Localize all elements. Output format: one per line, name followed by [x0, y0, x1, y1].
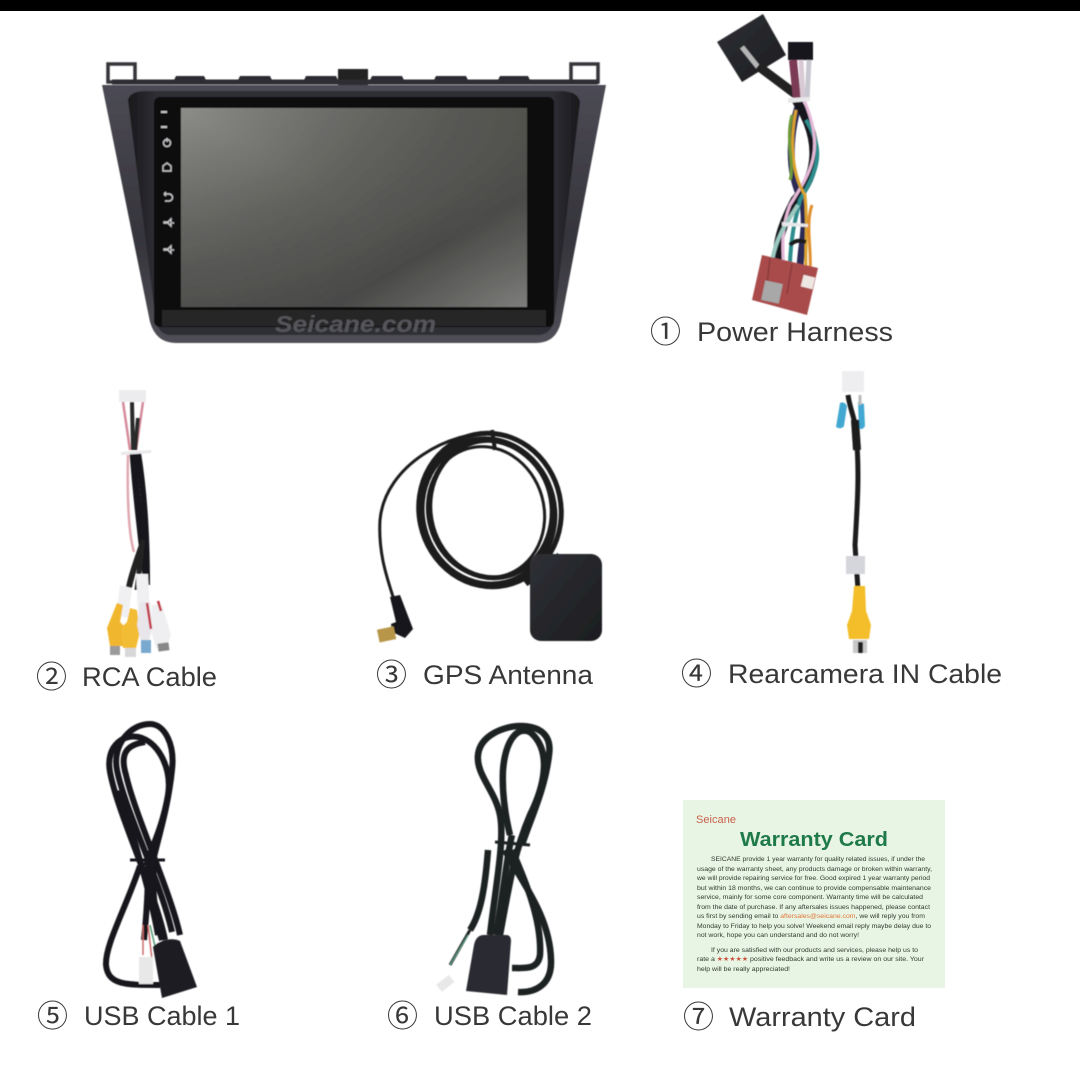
watermark: Seicane.com [275, 311, 436, 337]
warranty card: Seicane [696, 814, 736, 826]
angled connector [390, 595, 413, 638]
head unit radio [102, 64, 606, 343]
warranty text: but within 18 months, we can continue to provide compensable maintenance [697, 885, 931, 892]
USB plug [153, 939, 197, 998]
label: warranty card [683, 992, 916, 1037]
label: USB cable 1: ⑤ [37, 991, 68, 1036]
label: GPS antenna: GPS Antenna [423, 660, 594, 690]
label: USB cable 2 [387, 991, 592, 1036]
label: rear camera cable: Rearcamera IN Cable [728, 659, 1002, 689]
labels on wires [116, 574, 150, 618]
antenna plug [742, 47, 762, 72]
label: rear camera cable [681, 649, 1002, 694]
RCA cable [107, 390, 171, 657]
label: rear camera cable: ④ [681, 649, 712, 694]
black module [717, 14, 786, 82]
warranty text: If you are satisfied with our products and services, please help us to [711, 947, 918, 954]
display panel [154, 97, 554, 327]
cable coil [380, 420, 575, 600]
label: USB cable 2: ⑥ [387, 991, 418, 1036]
outer bezel [102, 85, 606, 343]
thin lead [380, 433, 497, 600]
power harness [717, 14, 818, 315]
red connector [752, 255, 818, 315]
label: RCA cable: ② [36, 652, 67, 697]
side buttons [161, 112, 174, 253]
GPS antenna [377, 420, 602, 643]
warranty text: we will provide repairing service for free. Good expired 1 year warranty period [696, 875, 930, 882]
warranty text: Monday to Friday to help you solve! Weekend email reply maybe delay due to [697, 923, 931, 930]
label: RCA cable: RCA Cable [82, 662, 217, 692]
label: RCA cable [36, 652, 217, 697]
USB cable 2 [436, 726, 551, 995]
label: GPS antenna [376, 650, 594, 695]
label: USB cable 1 [37, 991, 240, 1036]
label: power harness [650, 307, 893, 352]
label: USB cable 1: USB Cable 1 [84, 1001, 240, 1031]
label: GPS antenna: ③ [376, 650, 407, 695]
warranty text: from the date of purchase. If any aftersales issues happened, please contact [697, 904, 930, 911]
rear camera cable [836, 371, 871, 653]
wires [772, 60, 817, 275]
label: warranty card: ⑦ [683, 992, 714, 1037]
warranty text: rate a ★★★★★ positive feedback and write us a review on our site. Your [697, 955, 925, 963]
top black bar [0, 0, 1080, 11]
warranty card: Warranty Card [740, 829, 888, 851]
warranty text [696, 856, 932, 973]
warranty text: service, mainly for some core component. Warranty time will be calculated [697, 894, 923, 901]
warranty text: usage of the warranty sheet, any products damage or broken within warranty, [697, 866, 932, 873]
warranty text: not work, hope you can understand and do not worry! [697, 932, 859, 939]
USB cable 1 [106, 724, 197, 998]
mounting tabs [108, 64, 598, 82]
label: power harness: ① [650, 307, 681, 352]
label: USB cable 2: USB Cable 2 [434, 1001, 592, 1031]
warranty text: us first by sending email to aftersales@seicane.com , we will reply you from [697, 913, 926, 920]
black connector [788, 42, 813, 60]
screen [181, 108, 527, 307]
label: warranty card: Warranty Card [729, 1002, 916, 1032]
USB plug [466, 935, 511, 995]
warranty text: SEICANE provide 1 year warranty for quality related issues, if under the [711, 856, 925, 863]
plugs [107, 603, 124, 646]
warranty card [683, 800, 945, 988]
warranty text: help will be really appreciated! [697, 966, 790, 973]
puck [530, 554, 602, 641]
loose wires [450, 930, 470, 965]
wires and plug [143, 925, 152, 960]
label: power harness: Power Harness [697, 317, 893, 347]
